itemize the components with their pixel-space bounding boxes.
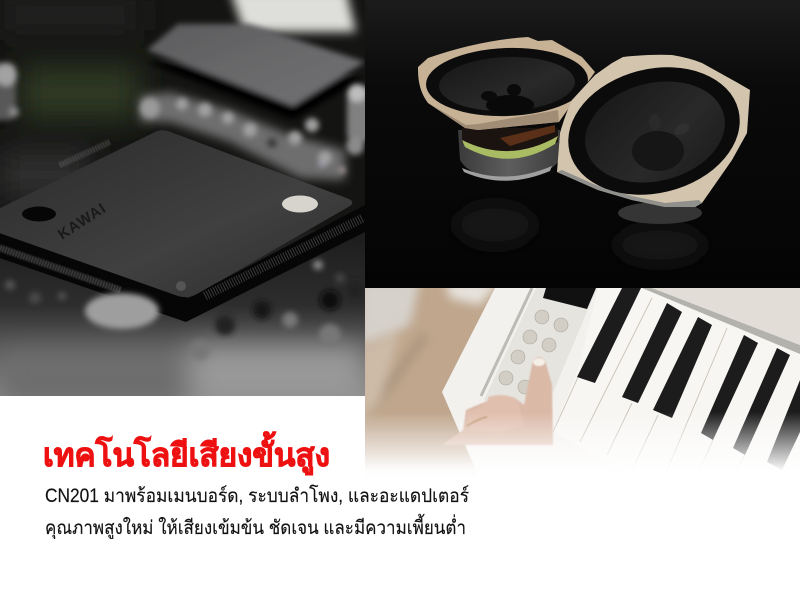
display: [543, 288, 596, 309]
panel: speakers photo: [365, 0, 800, 288]
left speaker: [418, 37, 595, 181]
body line 2: คุณภาพสูงใหม่ ให้เสียงเข้มข้น ชัดเจน และมีความเพี้ยนต่ำ: [45, 514, 466, 540]
background: lower blurred board texture: [5, 260, 364, 360]
background: wood floor and rug: [365, 288, 495, 416]
foreground: blurred capacitor: [85, 293, 159, 329]
speaker reflections: [462, 208, 698, 266]
panel: circuit board photo with Kawai chip: [0, 0, 371, 410]
magnet: [458, 130, 560, 178]
white fade: [365, 412, 800, 480]
key cover rail: [642, 288, 800, 354]
chip marks: [22, 206, 56, 222]
chip brand: KAWAI: [55, 200, 110, 243]
control buttons: [499, 310, 568, 394]
panel: piano photo: [365, 288, 800, 470]
black keys: [577, 288, 800, 470]
right speaker: [555, 50, 753, 224]
background: capacitors: [0, 62, 371, 155]
body text: [45, 484, 469, 540]
heading: เทคโนโลยีเสียงขั้นสูง: [43, 431, 330, 476]
background: bright bokeh highlight: [230, 0, 356, 32]
hand: [442, 357, 553, 445]
white keys: [553, 288, 800, 480]
background: bokeh solder band: [140, 92, 345, 180]
control strip: [484, 288, 597, 404]
main chip: [0, 130, 365, 322]
background: blurred upper chip: [146, 24, 365, 120]
frame ring: [418, 37, 595, 130]
piano body: [442, 288, 800, 480]
body line 1: CN201 มาพร้อมเมนบอร์ด, ระบบลำโพง, และอะแดปเตอร์: [45, 484, 469, 507]
